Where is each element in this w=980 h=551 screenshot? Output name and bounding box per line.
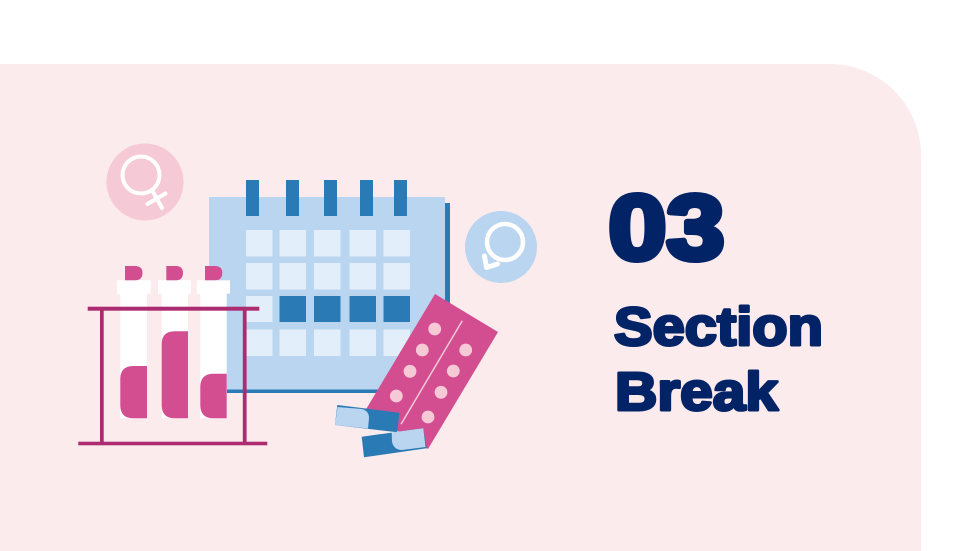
heading: Section Break: Break: [615, 362, 779, 422]
highlighted dates: [280, 296, 410, 322]
tube 2: [158, 266, 191, 418]
calendar: [209, 180, 450, 393]
pill blister pack: [365, 294, 498, 449]
tube 3: [197, 266, 230, 418]
test tubes: [117, 266, 230, 418]
calendar rings: [246, 180, 407, 216]
capsule 2: [362, 428, 427, 457]
section number: 03: [608, 177, 724, 279]
pills: [390, 323, 472, 423]
tube 1: [117, 266, 151, 418]
icon: female symbol badge: [106, 144, 184, 220]
icon: cycle symbol badge: [465, 211, 537, 283]
test tube rack: [78, 307, 267, 445]
capsule 1: [335, 405, 399, 432]
calendar date cells: [246, 230, 410, 356]
heading: Section Break: [614, 297, 823, 422]
heading: Section Break: Section: [614, 297, 823, 357]
